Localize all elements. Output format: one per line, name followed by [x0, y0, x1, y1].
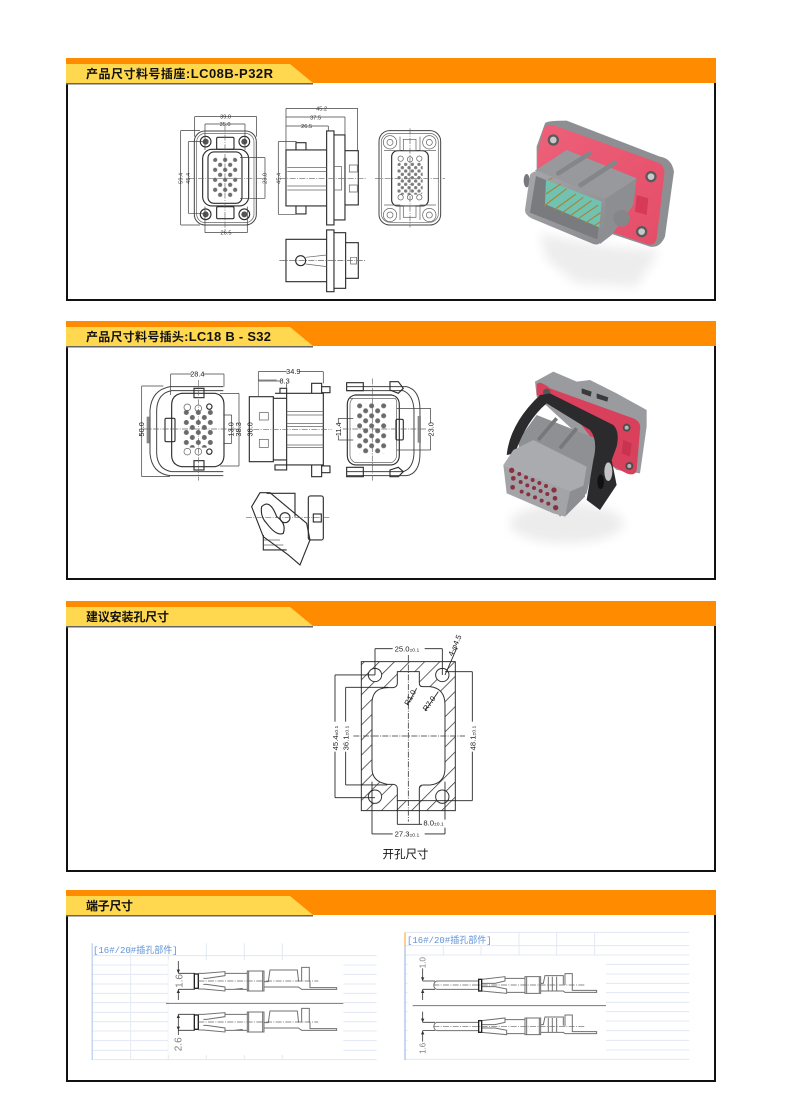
panel: recommended mounting holes: [66, 601, 716, 871]
drawing: plug rear view: 11.4: [334, 422, 343, 436]
drawing: plug side view: 34.9: [286, 367, 300, 376]
drawing: front view: [178, 115, 269, 237]
heading: 建议安装孔尺寸: [86, 609, 169, 624]
header bar: [66, 890, 716, 916]
drawing: plug front view: [137, 370, 243, 481]
panel frame: [67, 625, 715, 871]
drawing: cutout dimensions: 36.1±0.1: [342, 726, 351, 750]
drawing: plug front view: 38.3: [234, 422, 243, 436]
drawing: front view: 39.0: [220, 115, 231, 121]
photo: socket connector: [524, 121, 674, 287]
drawing: front view: 26.5: [220, 231, 231, 237]
grid title: right: [16#/20#插孔部件]: [407, 934, 492, 946]
terminal figure: left: 1.6: [175, 974, 186, 988]
drawing: side view: 45.4: [276, 173, 282, 184]
drawing: plug side view: [246, 367, 332, 477]
photo: plug and socket assembled: [503, 372, 647, 543]
drawing: bottom view: [279, 230, 366, 292]
terminal figure: right: [404, 932, 689, 1060]
heading: 产品尺寸料号插座:LC08B-P32R: [86, 66, 274, 81]
drawing: plug front view: 28.4: [190, 370, 204, 379]
drawing: plug lever view: [246, 493, 330, 565]
drawing: plug side view: 38.0: [246, 422, 255, 436]
drawing: side view: 37.5: [310, 115, 321, 121]
drawing: plug rear view: 23.0: [426, 422, 435, 436]
drawing: side view: 26.5: [301, 124, 312, 130]
drawing: cutout dimensions: R1.0: [402, 688, 418, 707]
drawing: rear view: [375, 128, 445, 227]
panel frame: [67, 914, 715, 1081]
drawing: front view: 59.4: [178, 173, 184, 184]
terminal figure: left: 2.6: [174, 1037, 185, 1051]
drawing: plug side view: 8.3: [280, 376, 290, 385]
panel: plug dimensions: [66, 321, 716, 579]
header bar: [66, 58, 716, 84]
header bar: [66, 601, 716, 628]
drawing: plug front view: 13.0: [227, 422, 236, 436]
drawing: side view: 45.2: [316, 107, 327, 113]
drawing: side view: [276, 107, 366, 225]
caption: cutout size: 开孔尺寸: [382, 847, 428, 861]
terminal figure: right: 1.6: [419, 1042, 428, 1054]
heading: 端子尺寸: [86, 898, 133, 913]
terminal figure: right: 1.0: [419, 957, 428, 968]
drawing: cutout dimensions: 45.4±0.1: [331, 726, 340, 750]
drawing: cutout dimensions: 48.1±0.1: [468, 726, 477, 750]
terminal figure: left: [92, 943, 377, 1060]
header bar: [66, 321, 716, 348]
drawing: cutout dimensions: 27.3±0.1: [395, 830, 419, 839]
grid title: left: [16#/20#插孔部件]: [93, 944, 178, 956]
drawing: front view: 23.0: [263, 173, 269, 184]
drawing: plug rear view: [334, 378, 435, 481]
drawing: front view: 35.0: [219, 122, 230, 128]
drawing: cutout dimensions: 8.0±0.1: [423, 819, 444, 828]
drawing: front view: 45.4: [186, 173, 192, 184]
drawing: cutout dimensions: R7.0: [421, 694, 438, 713]
panel frame: [67, 82, 715, 300]
drawing: cutout dimensions: 25.0±0.1: [395, 645, 419, 654]
drawing: cutout dimensions: 4-φ4.5: [446, 633, 464, 657]
drawing: cutout dimensions: [331, 633, 477, 839]
panel: socket dimensions: [66, 58, 716, 300]
drawing: plug front view: 50.0: [137, 422, 146, 436]
panel: terminal dimensions: [66, 890, 716, 1081]
panel frame: [67, 345, 715, 579]
heading: 产品尺寸料号插头:LC18 B - S32: [86, 329, 271, 344]
